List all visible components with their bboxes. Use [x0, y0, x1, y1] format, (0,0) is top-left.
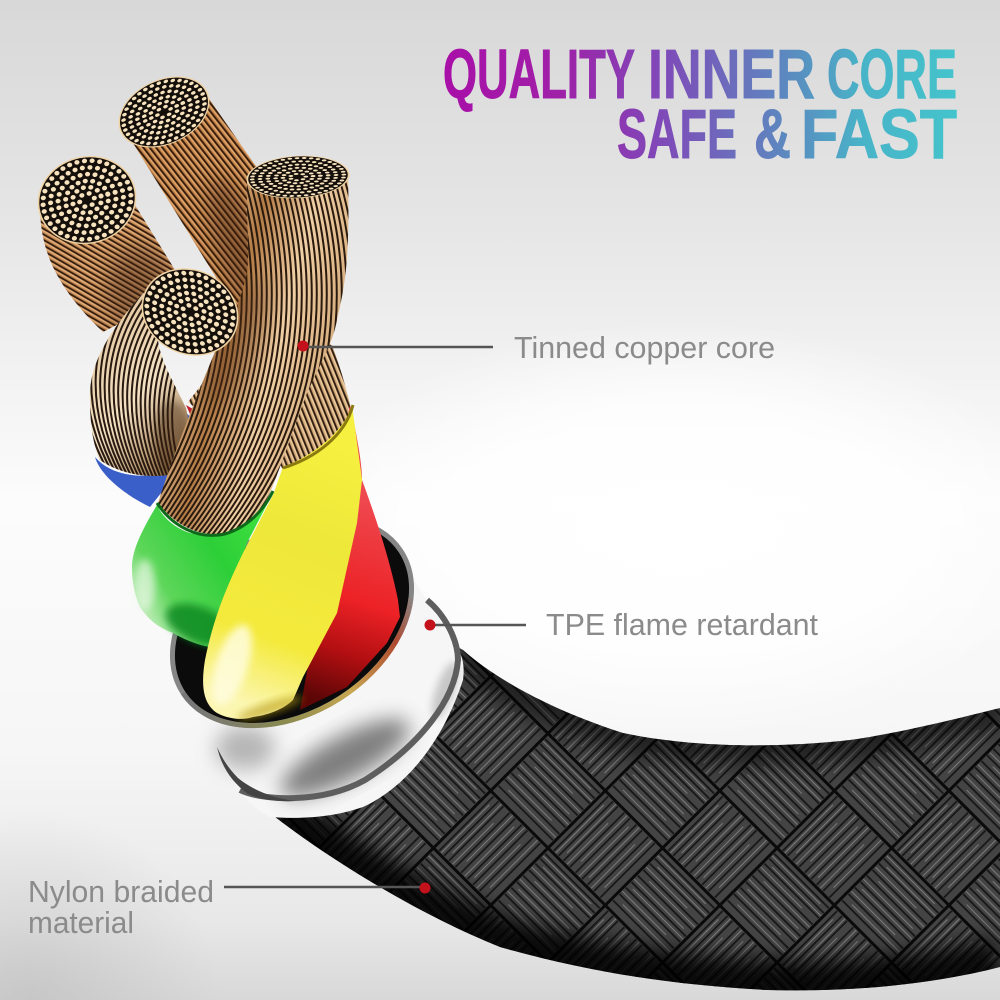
end face: back left wire [28, 145, 146, 255]
blue insulation [95, 410, 197, 507]
title: SAFE [617, 95, 737, 173]
callout: tinned copper core [298, 331, 775, 365]
copper strand: back left wire [40, 206, 175, 332]
copper strand: front main wire [158, 179, 348, 534]
title: FAST [801, 95, 957, 173]
yellow rim around rear wire [283, 405, 353, 468]
title: QUALITY [443, 35, 635, 113]
copper strand: back top wire [134, 98, 256, 306]
green rim around main wire [157, 491, 273, 535]
end face: front main wire [245, 153, 351, 201]
title: INNER [648, 35, 815, 113]
callout: TPE flame retardant [424, 608, 819, 642]
callout: TPE flame retardant: TPE flame retardant [546, 608, 819, 642]
end face: front left wire [127, 253, 253, 371]
braided nylon cable [260, 640, 1000, 1000]
collar front rim [183, 598, 411, 726]
red insulation [300, 405, 400, 710]
copper strand: right rear wire [268, 340, 355, 470]
copper strand: hidden middle wire [188, 345, 250, 418]
callout: tinned copper core: Tinned copper core [514, 331, 775, 365]
silver TPE collar [134, 476, 464, 818]
callout: nylon braided material [28, 875, 430, 940]
callout: nylon braided material: Nylon braided [28, 875, 214, 909]
title [443, 35, 957, 173]
yellow insulation [203, 405, 362, 724]
copper strand: front left wire [90, 293, 188, 476]
green insulation [132, 493, 273, 655]
callout: nylon braided material: material [28, 906, 134, 940]
red wire tip [186, 405, 205, 424]
end face: back top wire [107, 63, 221, 161]
title: & [754, 95, 791, 173]
